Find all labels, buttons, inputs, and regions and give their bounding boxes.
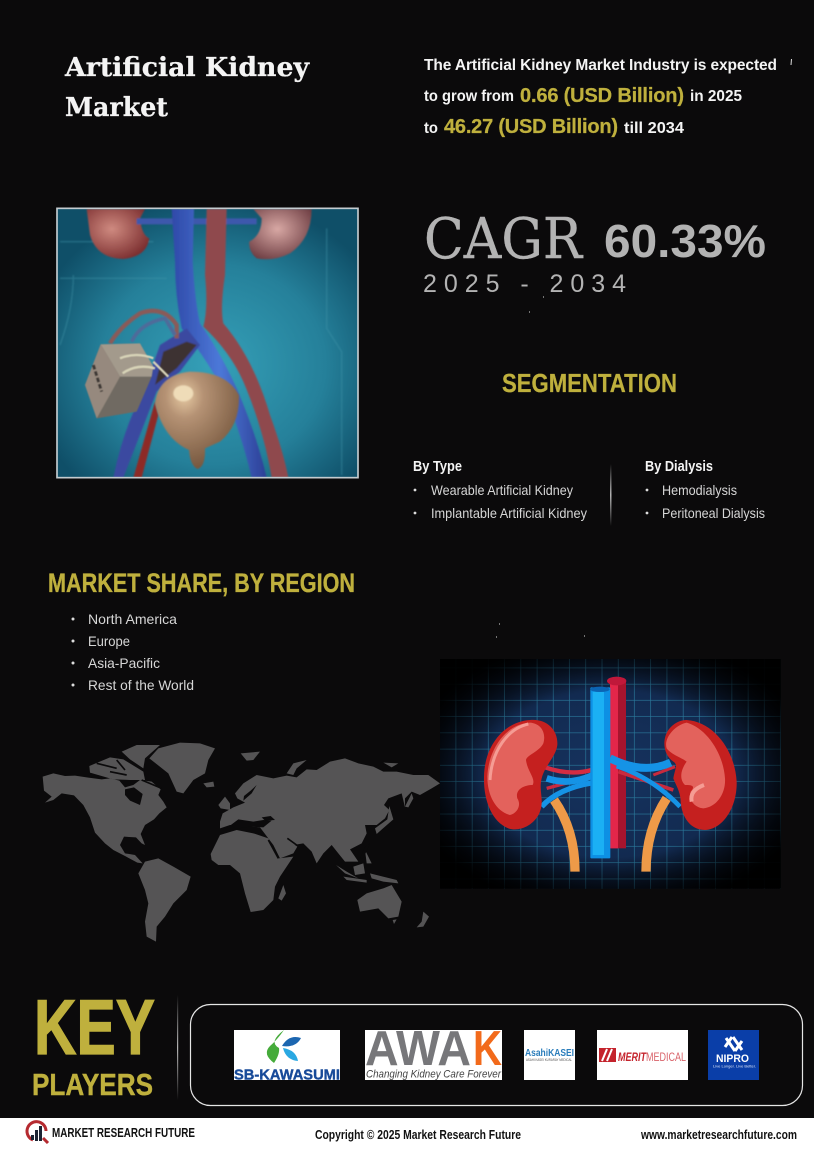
footer logo: MARKET RESEARCH FUTURE [52,1126,195,1140]
logo: Nipro: NIPRO [716,1053,749,1065]
CAGR figure: 2025 - 2034 [423,270,626,298]
heading: key players [32,983,155,1102]
logo: Merit Medical: MERIT [618,1050,647,1064]
market forecast text: till 2034 [624,120,684,137]
region list [72,611,194,693]
heading: key players: KEY [34,983,155,1071]
logo: Merit Medical [597,1030,688,1080]
logo: AWAK: AWA [365,1022,471,1076]
CAGR figure: CAGR [424,207,584,272]
heading: segmentation: SEGMENTATION [502,368,677,398]
logo: Merit Medical: MEDICAL [646,1050,686,1064]
segment list: by dialysis: Hemodialysis [662,482,737,498]
market forecast text [424,57,777,138]
region list: Asia-Pacific [88,655,160,671]
heading: key players: PLAYERS [32,1067,153,1102]
market forecast text: to grow from [424,88,514,105]
segment list: by type: By Type [413,458,462,475]
icon: vena cava [590,687,610,858]
footer bar [0,1118,814,1150]
logo: Asahi Kasei [524,1030,575,1080]
photo: implanted artificial kidney [57,208,358,478]
logo: Asahi Kasei: ASAHI KASEI KURARAY MEDICAL [526,1058,572,1062]
CAGR figure: 60.33% [604,215,766,267]
logo: SB-Kawasumi: SB-KAWASUMI [234,1066,340,1084]
picture: kidneys on blue grid [440,659,781,889]
region list: Rest of the World [88,677,194,693]
market forecast text: in 2025 [690,88,742,105]
title [64,52,311,123]
copyright: Copyright © 2025 Market Research Future [315,1128,521,1142]
logo: Nipro: Live Longer. Live Better. [713,1064,756,1068]
icon: left kidney [484,720,557,829]
segment list: by type: Wearable Artificial Kidney [431,482,573,498]
segment list: by dialysis: By Dialysis [645,458,713,475]
segment list: by type [413,458,587,521]
segment list: by dialysis: Peritoneal Dialysis [662,505,765,521]
heading: market share by region: MARKET SHARE, BY REGION [48,568,355,598]
footer logo [27,1122,195,1143]
logo: Asahi Kasei: AsahiKASEI [525,1048,574,1059]
CAGR figure [423,207,766,298]
market forecast text: to [424,120,438,137]
logo: AWAK: K [473,1022,502,1076]
icon: aorta [607,677,626,848]
segment list: by type: Implantable Artificial Kidney [431,505,587,521]
world map [43,743,440,942]
panel: key player logos [190,1004,802,1106]
region list: North America [88,611,177,627]
market forecast text: 46.27 (USD Billion) [444,116,618,138]
logo: Nipro [708,1030,759,1080]
icon: right kidney [664,720,737,830]
segment list: by dialysis [645,458,765,521]
icon: renal vessels [542,758,680,807]
market forecast text: The Artificial Kidney Market Industry is expected [424,57,777,74]
title: Artificial Kidney [64,52,311,83]
logo: AWAK: Changing Kidney Care Forever [366,1068,502,1080]
icon: ureters [554,798,667,872]
logo: SB-Kawasumi [234,1030,340,1084]
region list: Europe [88,633,130,649]
title: Market [65,92,169,123]
market forecast text: 0.66 (USD Billion) [520,85,684,107]
